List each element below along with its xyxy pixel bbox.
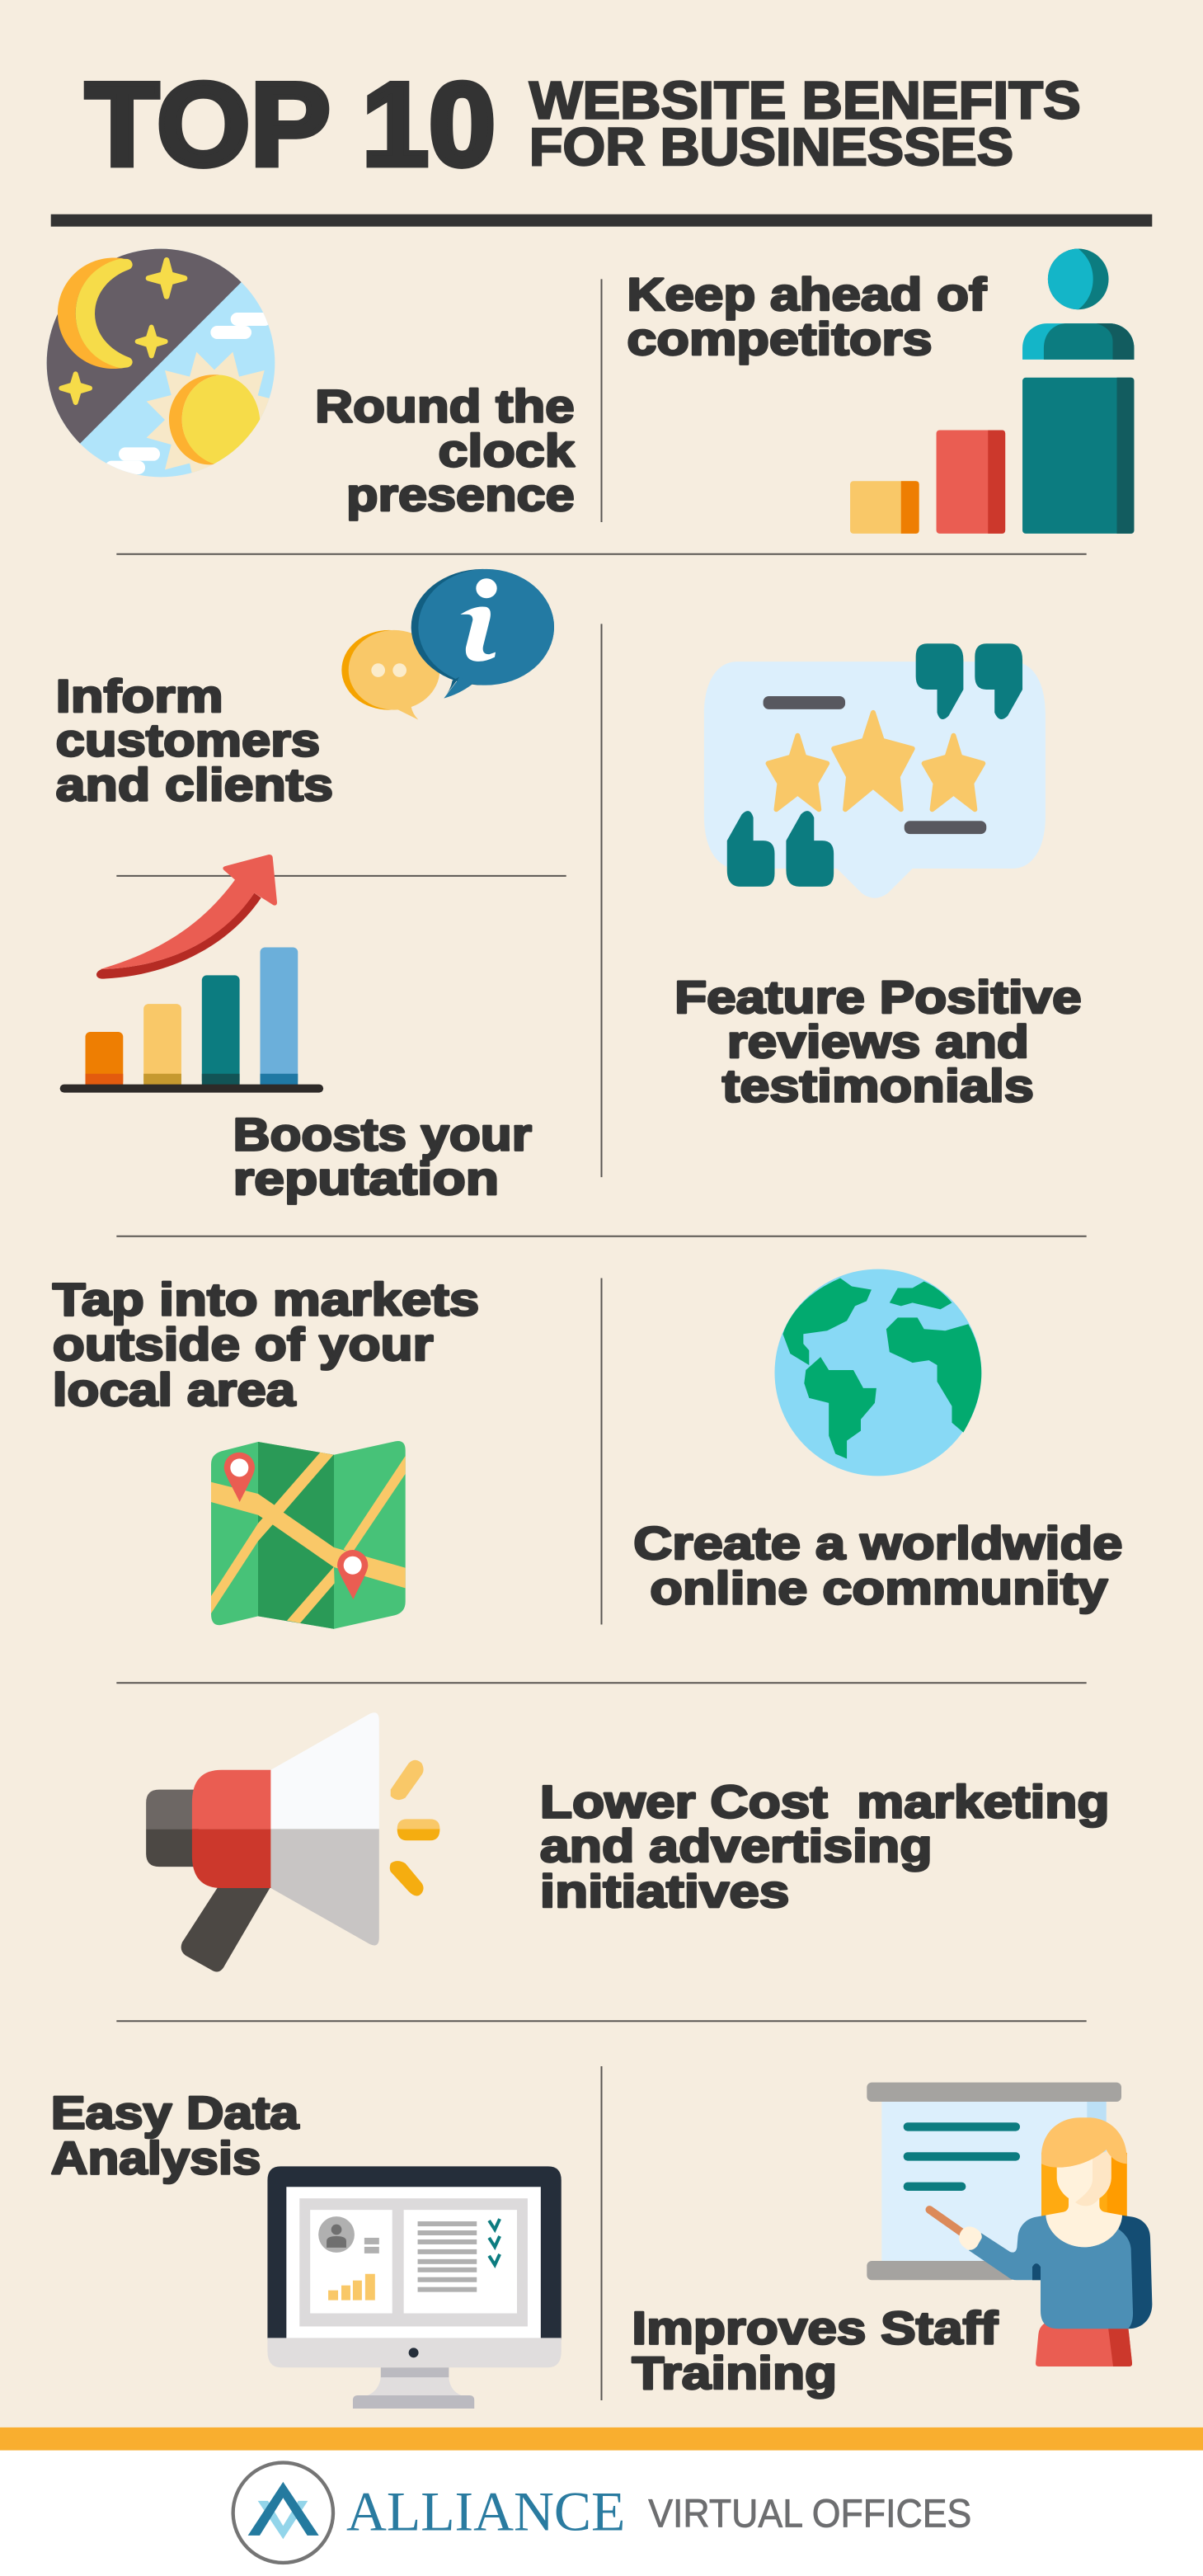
text: improves staff training: Training bbox=[632, 2348, 837, 2399]
panel: improves staff training bbox=[632, 2083, 1152, 2399]
text: tap into markets outside of your local area: outside of your bbox=[53, 1319, 433, 1370]
panel: easy data analysis bbox=[51, 2088, 562, 2409]
text: create a worldwide online community: Create a worldwide bbox=[633, 1518, 1122, 1569]
text: round the clock presence bbox=[315, 381, 576, 520]
text: feature positive reviews and testimonials: reviews and bbox=[727, 1016, 1029, 1067]
text: feature positive reviews and testimonials: Feature Positive bbox=[674, 972, 1082, 1023]
text: easy data analysis: Analysis bbox=[51, 2132, 261, 2183]
icon: review bubble with stars and quotes bbox=[704, 643, 1046, 898]
panel: round the clock presence bbox=[33, 239, 576, 520]
text: improves staff training bbox=[632, 2302, 999, 2399]
logo wordmark: ALLIANCE bbox=[346, 2480, 625, 2542]
text: easy data analysis: Easy Data bbox=[51, 2088, 299, 2139]
panel: keep ahead of competitors bbox=[627, 249, 1134, 534]
title: WEBSITE BENEFITS bbox=[529, 71, 1081, 130]
text: round the clock presence: Round the bbox=[315, 381, 575, 432]
text: lower cost marketing and advertising initiatives: initiatives bbox=[540, 1866, 789, 1917]
text: boosts your reputation: Boosts your bbox=[233, 1109, 532, 1160]
icon: person on top of bar chart bbox=[850, 249, 1134, 534]
text: create a worldwide online community: online community bbox=[650, 1563, 1108, 1614]
icon: folded map with pins bbox=[211, 1441, 406, 1629]
text: tap into markets outside of your local area: Tap into markets bbox=[53, 1274, 479, 1325]
text: inform customers and clients: customers bbox=[56, 715, 320, 766]
text: keep ahead of competitors bbox=[627, 269, 987, 365]
text: feature positive reviews and testimonials: testimonials bbox=[722, 1061, 1034, 1112]
panel: feature positive reviews and testimonials bbox=[674, 643, 1082, 1112]
panel: worldwide online community bbox=[633, 1269, 1122, 1614]
icon: rising arrow bbox=[96, 855, 277, 979]
icon: presenter at screen bbox=[867, 2083, 1152, 2366]
panel: boosts your reputation bbox=[60, 855, 532, 1204]
logo wordmark bbox=[346, 2480, 971, 2542]
icon: globe bbox=[774, 1269, 981, 1476]
logo: alliance virtual offices bbox=[233, 2463, 971, 2563]
panel: lower cost marketing bbox=[146, 1712, 1110, 1972]
text: inform customers and clients bbox=[56, 671, 333, 810]
text: round the clock presence: presence bbox=[346, 469, 575, 520]
icon: computer monitor with dashboard bbox=[267, 2166, 562, 2409]
text: feature positive reviews and testimonials bbox=[674, 972, 1082, 1112]
logo mark bbox=[233, 2463, 333, 2563]
text: create a worldwide online community bbox=[633, 1518, 1122, 1614]
text: tap into markets outside of your local area bbox=[53, 1274, 479, 1415]
title: FOR BUSINESSES bbox=[529, 118, 1013, 177]
text: inform customers and clients: and clients bbox=[56, 759, 333, 810]
text: lower cost marketing and advertising initiatives: Lower Cost marketing bbox=[540, 1776, 1110, 1827]
title: TOP 10 bbox=[86, 59, 496, 191]
text: lower cost marketing and advertising initiatives: and advertising bbox=[540, 1820, 933, 1872]
text: boosts your reputation bbox=[233, 1109, 532, 1204]
text: boosts your reputation: reputation bbox=[233, 1153, 499, 1204]
panel: inform customers and clients bbox=[56, 569, 554, 810]
text: round the clock presence: clock bbox=[438, 425, 576, 476]
text: easy data analysis bbox=[51, 2088, 299, 2183]
panel: tap into markets bbox=[53, 1274, 479, 1629]
footer band bbox=[0, 2428, 1203, 2451]
icon: speech bubbles with info bbox=[341, 569, 554, 720]
text: inform customers and clients: Inform bbox=[56, 671, 223, 722]
text: keep ahead of competitors: competitors bbox=[627, 313, 933, 365]
text: lower cost marketing and advertising initiatives bbox=[540, 1776, 1110, 1917]
text: improves staff training: Improves Staff bbox=[632, 2302, 999, 2353]
footer background bbox=[0, 2451, 1203, 2576]
icon: rising bar chart with arrow bbox=[60, 855, 323, 1093]
text: tap into markets outside of your local area: local area bbox=[53, 1364, 296, 1415]
icon: day and night circle bbox=[46, 249, 275, 477]
logo wordmark: VIRTUAL OFFICES bbox=[648, 2492, 971, 2536]
text: keep ahead of competitors: Keep ahead of bbox=[627, 269, 987, 320]
icon: megaphone bbox=[146, 1712, 439, 1972]
title bbox=[86, 59, 1081, 191]
